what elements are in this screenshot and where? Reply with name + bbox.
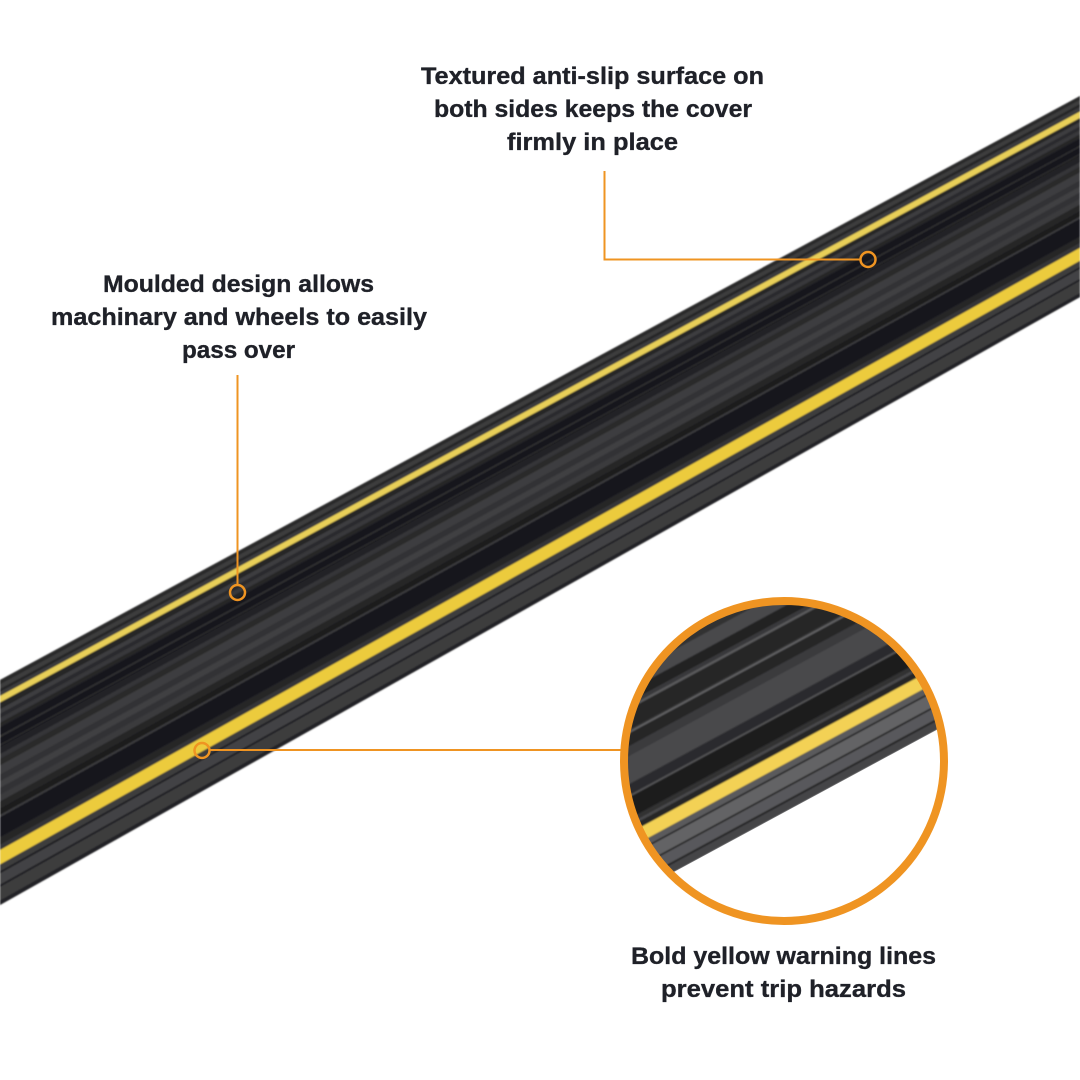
callout: yellow warning lines	[194, 743, 622, 758]
text: moulded design: pass over	[182, 337, 295, 364]
grooves in upper channel	[0, 146, 1080, 738]
bold yellow line	[0, 248, 1080, 865]
callout: moulded design	[230, 375, 245, 600]
text: moulded design: machinary and wheels to easily	[51, 304, 427, 331]
cable cover strip	[0, 96, 1080, 905]
text: anti-slip surface	[421, 63, 764, 156]
text: moulded design: Moulded design allows	[103, 271, 374, 298]
text: yellow warning lines: prevent trip hazards	[661, 976, 906, 1003]
text: yellow warning lines	[631, 943, 936, 1003]
callout: anti-slip surface	[604, 171, 876, 267]
enlarged yellow line	[642, 677, 923, 839]
text: yellow warning lines: Bold yellow warning lines	[631, 943, 936, 970]
text: anti-slip surface: firmly in place	[507, 129, 678, 156]
top yellow line	[0, 112, 1080, 702]
text: anti-slip surface: Textured anti-slip surface on	[421, 63, 764, 90]
text: anti-slip surface: both sides keeps the cover	[434, 96, 752, 123]
text: moulded design	[51, 271, 427, 364]
magnifier: zoomed detail of yellow warning line	[620, 597, 948, 925]
